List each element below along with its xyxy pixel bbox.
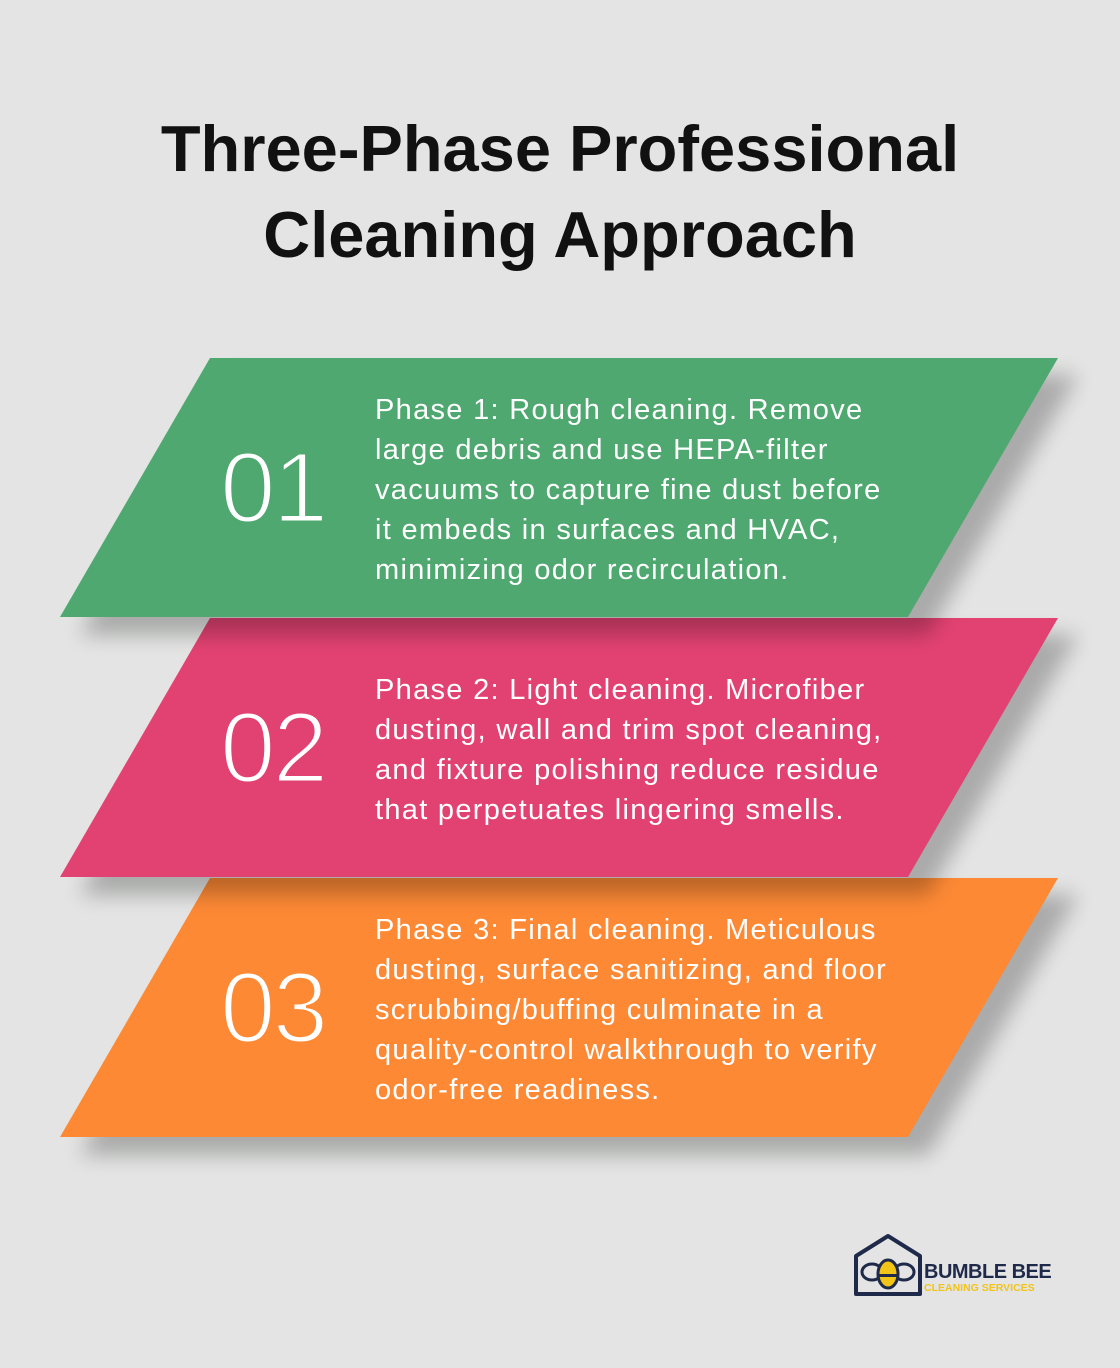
text phase 1: minimizing odor recirculation. bbox=[375, 554, 790, 586]
logo text: BUMBLE BEE bbox=[924, 1261, 1051, 1283]
text phase 3: Phase 3: Final cleaning. Meticulous bbox=[375, 914, 877, 946]
text phase 3 bbox=[375, 914, 887, 1106]
logo: CLEANING SERVICES bbox=[924, 1282, 1035, 1294]
text phase 1: large debris and use HEPA-filter bbox=[375, 434, 829, 466]
text phase 3: odor-free readiness. bbox=[375, 1074, 661, 1106]
text phase 1: vacuums to capture fine dust before bbox=[375, 474, 882, 506]
text phase 2 bbox=[375, 674, 883, 826]
number 02: 02 bbox=[220, 692, 325, 804]
text phase 1 bbox=[375, 394, 882, 586]
panel: phase 2 bbox=[220, 674, 883, 826]
number 03: 03 bbox=[220, 952, 325, 1064]
text phase 2: Phase 2: Light cleaning. Microfiber bbox=[375, 674, 865, 706]
icon: bee house bbox=[854, 1234, 922, 1296]
number 01: 01 bbox=[220, 432, 325, 544]
text phase 3: dusting, surface sanitizing, and floor bbox=[375, 954, 887, 986]
title: Three-Phase Professional bbox=[161, 112, 959, 185]
text phase 1: it embeds in surfaces and HVAC, bbox=[375, 514, 840, 546]
panel: phase 1 bbox=[220, 394, 882, 586]
text phase 3: scrubbing/buffing culminate in a bbox=[375, 994, 824, 1026]
text phase 3: quality-control walkthrough to verify bbox=[375, 1034, 878, 1066]
title bbox=[161, 112, 959, 271]
title: Cleaning Approach bbox=[263, 198, 857, 271]
text phase 1: Phase 1: Rough cleaning. Remove bbox=[375, 394, 863, 426]
logo bbox=[854, 1234, 1051, 1296]
text phase 2: and fixture polishing reduce residue bbox=[375, 754, 880, 786]
panel: phase 3 bbox=[220, 914, 887, 1106]
text phase 2: dusting, wall and trim spot cleaning, bbox=[375, 714, 883, 746]
text phase 2: that perpetuates lingering smells. bbox=[375, 794, 845, 826]
